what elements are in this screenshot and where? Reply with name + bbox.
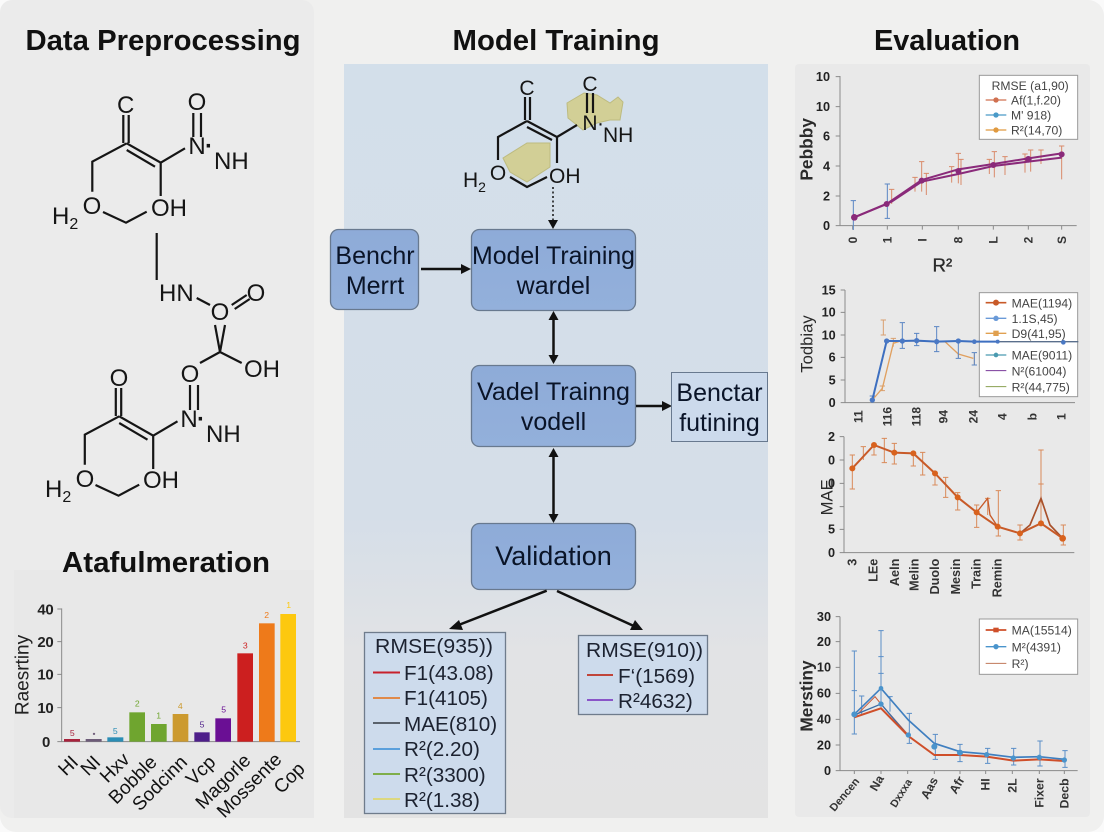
line chart: pebbby: R²	[932, 254, 952, 275]
molecule: highlighted structure: ·	[597, 112, 604, 135]
metrics box: left	[364, 632, 506, 814]
legend: merstiny: M²(4391)	[1012, 640, 1061, 654]
molecule: linking structure: OH	[244, 356, 280, 383]
bar values	[64, 614, 296, 742]
metrics box: right: R²4632)	[618, 690, 693, 713]
molecule: highlighted structure: 2	[478, 179, 486, 195]
heading: evaluation: Evaluation	[874, 25, 1020, 57]
line chart: todbiay: 94	[937, 410, 951, 423]
bar y axis ticks: 20	[37, 634, 53, 651]
line chart: pebbby	[796, 70, 1078, 275]
heading: data preprocessing: Data Preprocessing	[26, 25, 300, 57]
molecule: bottom structure: 2	[62, 489, 71, 506]
line chart: todbiay: 11	[852, 410, 866, 423]
line chart: todbiay: 10	[822, 328, 836, 342]
molecule: bottom structure: H	[45, 476, 62, 503]
line chart: merstiny: Dxxxa	[888, 777, 915, 810]
line chart: todbiay: 5	[829, 373, 836, 387]
arrow: model training to vadel training	[548, 311, 558, 364]
line chart: mae: Train	[970, 559, 984, 589]
legend: todbiay: 1.1S,45)	[1012, 312, 1058, 326]
line chart: pebbby: 2	[823, 189, 830, 203]
molecule: bottom structure: ·	[197, 406, 205, 433]
line chart: pebbby: 0	[823, 219, 830, 233]
metrics box: left: RMSE(935))	[375, 635, 493, 658]
bar rank labels	[70, 600, 291, 739]
bar axis labels: Magorle	[192, 750, 255, 814]
line chart: todbiay: 116	[881, 407, 895, 426]
bar axis labels: Mossente	[213, 749, 286, 822]
molecule: top structure: ·	[205, 133, 213, 160]
line chart: merstiny: 0	[824, 764, 831, 778]
box: validation: Validation	[495, 541, 612, 571]
molecule: top structure: 2	[69, 216, 78, 233]
panel: evaluation	[795, 25, 1090, 817]
panel: data preprocessing	[0, 0, 314, 822]
bar rank labels: 1	[156, 710, 161, 720]
line chart: mae: 0	[828, 546, 835, 560]
molecule: highlighted structure: O	[490, 162, 506, 185]
molecule: top structure: NH	[214, 148, 249, 175]
legend: todbiay: D9(41,95)	[1012, 327, 1066, 341]
legend: pebbby: RMSE (a1,90)	[992, 79, 1069, 93]
molecule: top structure: C	[117, 92, 134, 119]
metrics box: right: RMSE(910))	[586, 639, 703, 662]
box: vadel training	[472, 366, 636, 446]
line chart: mae: 2	[828, 430, 835, 444]
line chart: merstiny: 40	[817, 713, 831, 727]
bar axis labels: Sodcinn	[129, 752, 192, 815]
line chart: pebbby: 4	[823, 159, 830, 173]
line chart: merstiny: 20	[817, 738, 831, 752]
line chart: pebbby: 10	[816, 70, 830, 84]
metrics box: right	[578, 636, 708, 714]
arrow: benchr to model training	[421, 264, 471, 274]
line chart: mae: LEe	[866, 559, 880, 582]
line chart: todbiay: 1	[1054, 413, 1068, 420]
box: model training	[472, 230, 636, 310]
legend: todbiay: MAE(9011)	[1012, 349, 1072, 363]
legend: pebbby	[979, 75, 1078, 139]
molecule: linking structure: O	[247, 280, 265, 307]
molecule: bottom structure: O	[110, 365, 128, 392]
box: model training: Model Training	[472, 242, 635, 270]
line chart: pebbby: 6	[823, 129, 830, 143]
molecule: bottom structure: O	[76, 466, 94, 493]
line chart: pebbby: Pebbby	[796, 118, 816, 181]
line chart: pebbby: 1	[881, 236, 895, 243]
line chart: todbiay: 15	[822, 283, 836, 297]
arrow: dotted molecule to model training	[548, 187, 558, 229]
line chart: mae: Remin	[991, 559, 1005, 597]
bar axis labels: NI	[77, 752, 105, 780]
molecule: highlighted structure: C	[582, 73, 598, 96]
bar y axis ticks: 10	[37, 700, 53, 717]
line chart: mae: 0	[828, 477, 835, 491]
box: model training: wardel	[516, 272, 590, 300]
legend: todbiay	[979, 293, 1078, 397]
panel: model training	[330, 25, 768, 818]
line chart: todbiay: 0	[829, 396, 836, 410]
line chart: mae: 5	[828, 523, 835, 537]
line chart: mae: MAE	[817, 479, 836, 515]
molecule: highlighted structure	[463, 73, 633, 195]
heading: atafulmeration: Atafulmeration	[62, 547, 270, 579]
molecule: highlighted structure: NH	[603, 124, 633, 147]
bar rank labels: 2	[264, 610, 269, 620]
line chart: todbiay: Todbiay	[797, 315, 816, 373]
box: benchr merrt: Benchr	[335, 242, 415, 270]
bar axis labels: Vcp	[182, 752, 220, 790]
line chart: todbiay: 24	[967, 410, 981, 423]
bar rank labels: 5	[221, 705, 226, 715]
bar y axis ticks: 0	[42, 734, 50, 751]
arrow: validation to right metrics	[557, 591, 643, 630]
molecule: bottom structure	[45, 361, 241, 506]
bar axis labels: Bobble	[105, 752, 162, 809]
bar rank labels: 5	[70, 728, 75, 738]
line chart: mae: Melin	[907, 559, 921, 591]
legend: pebbby: R²(14,70)	[1011, 124, 1062, 138]
molecule: highlighted structure: C	[519, 77, 535, 100]
legend: merstiny: MA(15514)	[1012, 624, 1072, 638]
molecule: linking structure: HN	[159, 280, 194, 307]
line chart: pebbby: I	[916, 238, 930, 242]
metrics box: left: MAE(810)	[404, 713, 497, 736]
line chart: mae: 0	[828, 453, 835, 467]
line chart: mae: Mesin	[949, 559, 963, 595]
bar rank labels: 5	[200, 719, 205, 729]
box: benctar futining: Benctar	[676, 379, 763, 407]
molecule: highlighted structure: H	[463, 169, 478, 192]
line chart: merstiny: Dencen	[828, 776, 862, 814]
bar y axis title: Raesrtiny	[12, 634, 33, 715]
bar axis labels: Cop	[270, 759, 310, 798]
bar axis labels: Hxv	[96, 749, 135, 787]
line chart: merstiny: 2L	[1005, 778, 1019, 793]
legend: pebbby: Af(1,f.20)	[1011, 94, 1061, 108]
bar rank labels: •	[92, 729, 96, 739]
molecule: highlighted structure: N	[582, 112, 598, 135]
bar axis labels: HI	[55, 752, 83, 780]
bar rank labels: 3	[243, 641, 248, 651]
line chart: pebbby: 2	[1022, 236, 1036, 243]
legend: merstiny: R²)	[1012, 657, 1029, 671]
line chart: todbiay: b	[1026, 413, 1040, 420]
molecule: highlighted structure: OH	[549, 165, 580, 188]
metrics box: left: R²(3300)	[404, 764, 486, 787]
line chart: pebbby: L	[987, 236, 1001, 244]
line chart: merstiny: HI	[979, 778, 993, 791]
bar y axis ticks	[37, 601, 53, 751]
bar rank labels: 4	[178, 701, 183, 711]
legend: todbiay: MAE(1194)	[1012, 296, 1072, 310]
line chart: pebbby: 0	[846, 236, 860, 243]
box: vadel training: vodell	[521, 408, 586, 436]
bar y axis ticks: 10	[37, 667, 53, 684]
molecule: top structure: O	[188, 89, 206, 116]
line chart: merstiny: Decb	[1057, 778, 1071, 808]
bar rank labels: 2	[135, 699, 140, 709]
arrow: validation to vadel training	[548, 448, 558, 523]
heading: model training: Model Training	[452, 25, 660, 57]
box: vadel training: Vadel Trainng	[477, 378, 630, 406]
line chart: pebbby: 10	[816, 100, 830, 114]
molecule: top structure: N	[188, 133, 206, 160]
box: benctar futining	[672, 372, 768, 442]
line chart: pebbby: 8	[952, 236, 966, 243]
line chart: merstiny: Aas	[918, 775, 941, 801]
line chart: mae: 3	[845, 559, 859, 566]
metrics box: left: F1(43.08)	[404, 662, 494, 685]
metrics box: left: R²(1.38)	[404, 789, 480, 812]
line chart: todbiay: 6	[829, 351, 836, 365]
molecule: top structure	[52, 89, 249, 233]
molecule: linking structure: O	[211, 299, 229, 326]
bar rank labels: 5	[113, 726, 118, 736]
line chart: merstiny: Na	[867, 773, 887, 793]
legend: todbiay: R²(44,775)	[1012, 380, 1070, 394]
line chart: todbiay	[797, 283, 1078, 426]
box: benctar futining: futining	[679, 409, 760, 437]
metrics box: left: R²(2.20)	[404, 738, 480, 761]
line chart: todbiay: 118	[909, 407, 923, 426]
molecule: top structure: O	[83, 193, 101, 220]
line chart: todbiay: 4	[996, 413, 1010, 420]
line chart: merstiny: 60	[817, 687, 831, 701]
legend: pebbby: M' 918)	[1011, 108, 1051, 122]
line chart: merstiny: Fixer	[1032, 778, 1046, 808]
molecule: top structure: OH	[151, 195, 187, 222]
line chart: pebbby: S	[1055, 236, 1069, 244]
bar axis labels	[55, 749, 310, 822]
molecule: top structure: H	[52, 203, 69, 230]
metrics box: left: F1(4105)	[404, 687, 488, 710]
molecule: bottom structure: O	[181, 361, 199, 388]
molecule: bottom structure: OH	[143, 467, 179, 494]
line chart: merstiny: Afr	[947, 774, 968, 796]
metrics box: right: F‘(1569)	[618, 665, 695, 688]
bar chart	[12, 600, 310, 822]
molecule: bottom structure: N	[180, 406, 198, 433]
line chart: mae	[817, 430, 1074, 597]
molecule: linking structure	[157, 233, 280, 383]
line chart: merstiny: 20	[817, 635, 831, 649]
line chart: todbiay: 10	[822, 306, 836, 320]
arrow: vadel training to benctar	[636, 401, 672, 411]
box: validation	[472, 524, 636, 590]
arrow: validation to left metrics	[449, 591, 547, 630]
bar y axis ticks: 40	[37, 601, 53, 618]
legend: todbiay: N²(61004)	[1012, 364, 1066, 378]
bar rank labels: 1	[286, 600, 291, 610]
line chart: mae: Aeln	[888, 559, 902, 586]
box: benchr merrt: Merrt	[346, 272, 404, 300]
line chart: merstiny: 30	[817, 610, 831, 624]
line chart: merstiny	[796, 610, 1078, 814]
molecule: bottom structure: NH	[206, 421, 241, 448]
legend: merstiny	[979, 619, 1078, 674]
line chart: mae: Duolo	[928, 558, 942, 595]
line chart: merstiny: Merstiny	[796, 660, 816, 732]
line chart: merstiny: 10	[817, 661, 831, 675]
box: benchr merrt	[330, 230, 418, 310]
